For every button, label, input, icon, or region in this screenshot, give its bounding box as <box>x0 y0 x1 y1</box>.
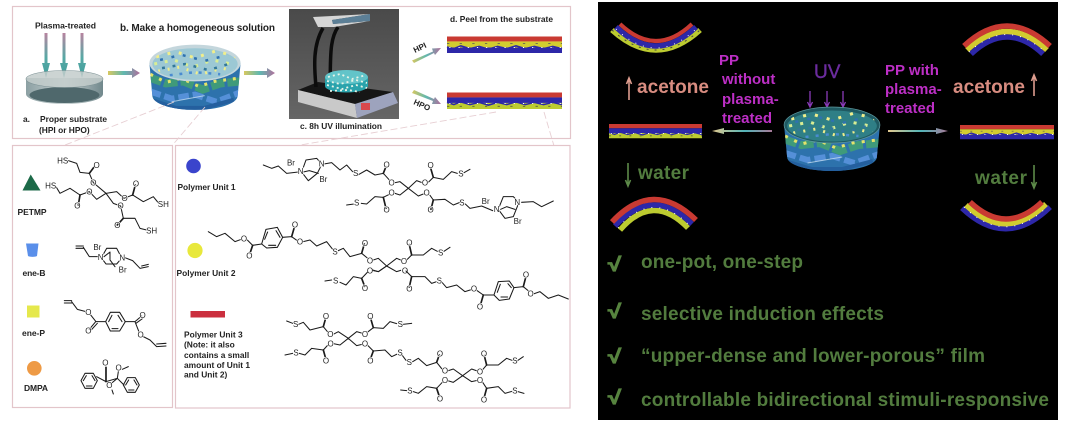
film: curved bottom right <box>962 202 1050 229</box>
molecule: polymer unit 2 lower <box>325 266 568 312</box>
item: controllable: controllable bidirectional stimuli-responsive <box>641 390 1049 411</box>
molecules: monomers: O <box>86 187 92 196</box>
molecule: polymer unit 3: S <box>397 348 403 357</box>
molecule: polymer unit 2: O <box>292 220 298 229</box>
arrow: water right <box>1032 165 1036 188</box>
molecule: polymer unit 3: S <box>398 320 403 329</box>
icon: DMPA sphere <box>27 361 42 376</box>
molecule: polymer unit 1: O <box>389 178 395 187</box>
arrow: to UV <box>244 68 275 78</box>
molecules: monomers: O <box>85 326 91 335</box>
panel: monomers <box>12 146 172 408</box>
molecule: polymer unit 3: O <box>362 339 368 348</box>
caption: step c: c. 8h UV illumination <box>300 121 382 131</box>
icon: solution dish <box>148 45 242 110</box>
molecule: polymer unit 1: O <box>422 178 428 187</box>
list: features <box>608 252 1049 411</box>
text: step a: Proper substrate <box>40 114 107 124</box>
molecules: monomers: Br <box>93 243 102 252</box>
molecule: polymer unit 2 lower: O <box>471 285 477 294</box>
heading: step d: d. Peel from the substrate <box>450 14 553 24</box>
label: water right: water <box>974 168 1028 189</box>
molecule: polymer unit 2 lower: O <box>528 289 534 298</box>
icon: UV arrows <box>808 91 846 107</box>
label: PP without plasma-treated: PP <box>719 52 739 69</box>
molecule: polymer unit 3: S <box>407 386 413 395</box>
molecules: monomers: O <box>138 331 144 340</box>
arrow: HPI: HPI <box>412 41 428 55</box>
molecules: monomers: O <box>122 194 128 203</box>
molecule: polymer unit 3 <box>285 312 524 404</box>
molecule: polymer unit 1: O <box>428 206 434 215</box>
label: polymer unit 3: amount of Unit 1 <box>184 360 250 370</box>
arrow: acetone left <box>626 78 632 100</box>
molecule: polymer unit 1: Br <box>514 217 522 226</box>
label: polymer unit 3: contains a small <box>184 350 249 360</box>
molecules: monomers: N <box>119 254 125 263</box>
molecule: polymer unit 2 lower: S <box>437 277 442 286</box>
item: one-pot: √ <box>608 254 621 275</box>
film: curved bottom left <box>612 199 696 230</box>
label: PP with plasma-treated: treated <box>885 100 935 117</box>
molecules: monomers: O <box>85 308 91 317</box>
molecule: polymer unit 2: O <box>402 266 408 275</box>
molecules: monomers: O <box>116 364 122 373</box>
panel: fabrication steps <box>12 6 570 138</box>
molecules: monomers: O <box>114 221 120 230</box>
molecule: polymer unit 1: O <box>384 206 390 215</box>
molecule: polymer unit 3: O <box>477 367 483 376</box>
icon: substrate dish <box>26 70 103 104</box>
molecules: monomers: O <box>106 381 112 390</box>
label: UV: UV <box>814 62 841 83</box>
molecules: monomers: O <box>90 179 96 188</box>
icon: PETMP pyramid <box>22 174 40 190</box>
molecule: polymer unit 2: O <box>362 239 368 248</box>
molecules: monomers: HS <box>57 156 68 165</box>
molecule: polymer unit 2 lower: O <box>477 303 483 312</box>
arrow: HPI <box>412 41 441 63</box>
molecule: polymer unit 3: O <box>442 376 448 385</box>
molecule: polymer unit 3: O <box>323 357 329 366</box>
molecule: polymer unit 1: O <box>384 160 390 169</box>
molecule: polymer unit 3: S <box>512 386 518 395</box>
molecules: monomers: SH <box>146 226 157 235</box>
molecule: polymer unit 3: O <box>481 349 487 358</box>
label: acetone left: acetone <box>637 77 709 98</box>
molecule: polymer unit 1: Br <box>482 197 490 206</box>
icon: polymer unit 2 sphere <box>187 243 203 258</box>
molecule: polymer unit 1: N <box>494 205 500 214</box>
molecule: polymer unit 3: O <box>367 357 373 366</box>
molecule: polymer unit 2 lower: S <box>333 277 338 286</box>
molecule: polymer unit 1: S <box>353 169 358 178</box>
label: polymer unit 2: Polymer Unit 2 <box>176 268 236 278</box>
molecule: polymer unit 2: O <box>401 257 407 266</box>
arrow: water left <box>626 163 630 186</box>
molecule: polymer unit 3: O <box>367 312 373 321</box>
arrow: acetone right <box>1032 75 1036 96</box>
label: PETMP: PETMP <box>18 207 47 217</box>
icon: polymer unit 3 bar <box>190 311 225 318</box>
film: curved top left <box>612 24 700 50</box>
molecule: polymer unit 1: S <box>458 169 464 178</box>
icon: polymer unit 1 sphere <box>186 159 201 173</box>
label: DMPA: DMPA <box>24 383 48 393</box>
molecule: polymer unit 2: S <box>332 248 338 257</box>
molecule: polymer unit 3: O <box>442 367 448 376</box>
label: polymer unit 1: Polymer Unit 1 <box>178 182 236 192</box>
arrow: HPO <box>412 90 441 113</box>
icon: ene-B cup <box>26 244 38 257</box>
molecules: monomers: O <box>102 358 108 367</box>
molecules: monomers: HS <box>45 182 56 191</box>
label: PP with plasma-treated: plasma- <box>885 81 942 98</box>
molecule: polymer unit 2 lower: O <box>406 285 412 294</box>
icon: plasma arrows <box>42 33 86 78</box>
label: water left: water <box>637 163 690 184</box>
item: one-pot: one-pot, one-step <box>641 252 803 273</box>
item: upper-dense: “upper-dense and lower-porous” film <box>641 346 985 367</box>
arrow: HPO: HPO <box>412 98 432 113</box>
label: polymer unit 3: Polymer Unit 3 <box>184 330 243 340</box>
molecule: polymer unit 1: N <box>514 198 520 207</box>
panel: black summary <box>598 2 1058 420</box>
molecule: polymer unit 3: O <box>327 330 333 339</box>
molecule: polymer unit 3: O <box>323 312 329 321</box>
text: step a: a. <box>23 114 30 124</box>
molecule: polymer unit 1: S <box>459 198 465 207</box>
molecule: polymer unit 2: O <box>367 266 373 275</box>
molecule: polymer unit 3: O <box>437 349 443 358</box>
molecules: monomers: O <box>118 202 124 211</box>
molecule: polymer unit 3: O <box>477 376 483 385</box>
molecules: monomers: O <box>133 179 139 188</box>
molecule: polymer unit 2: O <box>246 251 252 260</box>
label: PP without plasma-treated: without <box>721 71 775 88</box>
molecule: polymer unit 2 lower: O <box>523 271 529 280</box>
label: polymer unit 3: and Unit 2) <box>184 370 227 380</box>
molecule: polymer unit 3: O <box>437 395 443 404</box>
label: acetone right: acetone <box>953 77 1025 98</box>
molecule: polymer unit 3: S <box>293 320 298 329</box>
molecules: monomers: N <box>98 253 104 262</box>
icon: ene-P cylinder <box>27 306 40 318</box>
film: HPO <box>447 92 562 109</box>
label: ene-B: ene-B <box>22 268 46 278</box>
molecule: polymer unit 1: S <box>354 198 359 207</box>
molecule: polymer unit 3: O <box>328 339 334 348</box>
molecule: polymer unit 2: O <box>406 238 412 247</box>
label: ene-P: ene-P <box>22 328 45 338</box>
molecule: polymer unit 1: O <box>389 188 395 197</box>
item: selective induction: selective induction effects <box>641 304 884 325</box>
molecule: polymer unit 2: S <box>438 248 443 257</box>
connector lines <box>17 102 567 190</box>
molecules: monomers: O <box>94 161 100 170</box>
text: step a: (HPI or HPO) <box>39 125 90 135</box>
molecules: monomers: O <box>74 201 80 210</box>
molecule: polymer unit 1 <box>263 158 553 226</box>
label: polymer unit 3: (Note: it also <box>184 340 235 350</box>
molecule: polymer unit 3: O <box>362 330 368 339</box>
label: PP with plasma-treated: PP with <box>885 62 939 79</box>
item: controllable: √ <box>608 387 621 408</box>
image: UV illumination device <box>289 9 399 119</box>
panel: polymer units <box>176 146 570 408</box>
molecule: polymer unit 1: N <box>298 167 304 176</box>
molecule: polymer unit 1: N <box>319 160 325 169</box>
molecule: polymer unit 2 lower: O <box>362 284 368 293</box>
film: curved top right <box>964 26 1050 54</box>
film: HPI <box>447 36 562 53</box>
icon: reaction dish <box>783 107 881 171</box>
item: selective induction: √ <box>608 301 621 322</box>
molecules: monomers: SH <box>158 200 169 209</box>
label: PP without plasma-treated: plasma- <box>722 91 779 108</box>
molecule: polymer unit 1: O <box>424 188 430 197</box>
molecule: polymer unit 1: O <box>428 161 434 170</box>
film: flat left <box>609 124 702 138</box>
label: PP without plasma-treated: treated <box>722 110 772 127</box>
heading: step b: b. Make a homogeneous solution <box>120 23 275 34</box>
arrow: to right film <box>888 128 948 134</box>
molecule: polymer unit 3: S <box>512 357 518 366</box>
film: flat right <box>960 125 1054 139</box>
molecule: polymer unit 3: O <box>481 395 487 404</box>
molecule: polymer unit 3: S <box>293 348 299 357</box>
molecule: polymer unit 2: O <box>297 237 303 246</box>
molecule: polymer unit 1: Br <box>287 159 295 168</box>
heading: plasma treated: Plasma-treated <box>35 20 96 30</box>
arrow: to left film <box>712 128 772 134</box>
molecules: monomers: Br <box>119 266 127 275</box>
molecule: polymer unit 2: O <box>241 234 247 243</box>
molecules: monomers <box>45 156 169 394</box>
molecule: polymer unit 1: Br <box>319 175 328 184</box>
molecule: polymer unit 2: O <box>367 256 373 265</box>
molecules: monomers: O <box>140 311 146 320</box>
arrow: to solution <box>108 68 140 78</box>
molecule: polymer unit 2 <box>208 220 450 275</box>
item: upper-dense: √ <box>608 346 621 367</box>
molecule: polymer unit 3: S <box>407 358 412 367</box>
